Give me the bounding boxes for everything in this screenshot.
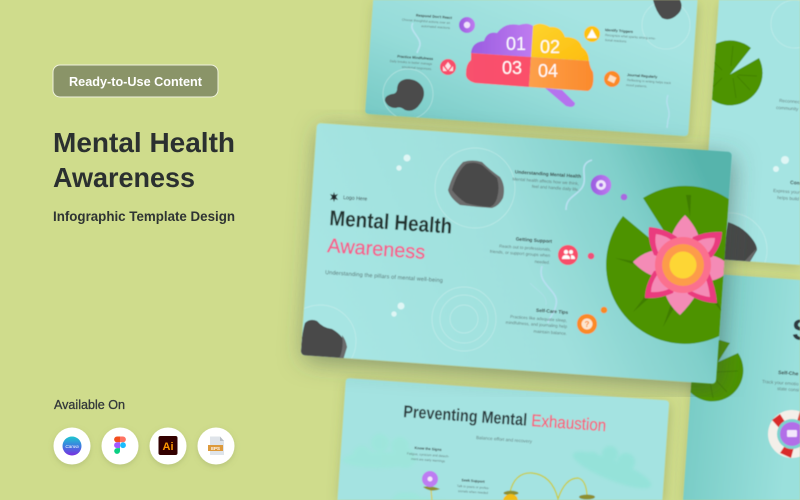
- squiggle: [412, 23, 420, 53]
- dot pink: [588, 253, 594, 259]
- icon: Canva: Canva: [65, 444, 79, 449]
- dots: [773, 156, 789, 172]
- squiggle: [541, 266, 556, 323]
- squiggle faint: [530, 283, 546, 305]
- icon: rock right: [642, 0, 690, 49]
- text: Connect: [773, 180, 800, 202]
- icon: cloud small: [392, 492, 445, 500]
- item: Know the Signs: Fatigue, cynicism and detach-: [407, 452, 449, 458]
- item: Practice Mindfulness: [390, 54, 456, 75]
- item: Getting Support: friends, or support groups when: [490, 249, 551, 258]
- icon: lily pad: [606, 185, 730, 344]
- item: Self-Care Tips: [505, 308, 569, 336]
- dots: [391, 154, 410, 317]
- icon: cloud right: [573, 446, 651, 488]
- item: Practice Mindfulness: Daily breaks to better manage: [390, 59, 432, 66]
- icon: question: [577, 314, 597, 334]
- item: Getting Support: needed.: [534, 259, 550, 265]
- subtitle: Understanding the pillars of mental well-being: [325, 270, 443, 284]
- icon: olive cap: [579, 495, 595, 499]
- icon: rock left: [383, 69, 433, 119]
- icon: Canva: [54, 428, 90, 464]
- text: Connect: Express your: [773, 188, 800, 195]
- item: Identify Triggers: Recognize what sparks strong emo-: [605, 33, 656, 41]
- item: Getting Support: Getting Support: [515, 236, 553, 245]
- rings: [432, 287, 496, 351]
- badge: Ready-to-Use Content: [69, 74, 203, 89]
- subheading: Infographic Template Design: [53, 208, 235, 224]
- item: Understanding Mental Health: Understanding Mental Health: [515, 169, 581, 180]
- icon: Figma: [102, 428, 138, 464]
- heading: Awareness: [53, 162, 195, 193]
- item: Know the Signs: [407, 446, 449, 463]
- text: Connect: Con: [790, 180, 800, 187]
- title: Mental Health: [329, 206, 453, 239]
- heading: Mental Health: [53, 127, 235, 158]
- logo: Logo Here: [343, 195, 368, 203]
- subtitle: Balance effort and recovery: [476, 435, 533, 444]
- icon: purple flower: [422, 471, 440, 500]
- item: Respond Don't React: [402, 13, 475, 33]
- text: Reconnect: [776, 98, 800, 112]
- item: Self-Care Tips: maintain balance.: [533, 329, 567, 336]
- rock: [724, 212, 768, 262]
- dot orange: [601, 307, 607, 313]
- item: Respond Don't React: Choose thoughtful actions over an: [402, 18, 450, 25]
- yellow stems: [510, 473, 587, 499]
- brain: section 02: 02: [540, 37, 560, 57]
- item: Seek Support: sionals when needed: [458, 489, 488, 495]
- icon: question: ?: [585, 320, 590, 329]
- title: [404, 404, 606, 432]
- squiggle: [566, 160, 592, 210]
- title: Exhaustion: [531, 411, 607, 435]
- item: Identify Triggers: [584, 26, 656, 44]
- brain: section 02: [531, 24, 589, 61]
- text: Self-Check: [762, 370, 799, 393]
- brain: section 03: 03: [502, 58, 522, 78]
- panel: right upper slide: [706, 0, 800, 271]
- item: Understanding Mental Health: Mental health affects how we think,: [512, 176, 579, 186]
- brain: section 01: 01: [506, 34, 526, 54]
- item: Getting Support: [490, 236, 553, 265]
- icon: lily pad small: [711, 40, 764, 106]
- item: Identify Triggers: tional reactions: [605, 38, 627, 44]
- item: Know the Signs: Know the Signs: [414, 446, 442, 452]
- item: Self-Care Tips: mindfulness, and journaling help: [505, 320, 568, 329]
- icon: EPS file: EPS: [211, 446, 220, 451]
- panel: right lower slide: [681, 273, 800, 500]
- text: Self-Check: state consi: [777, 386, 799, 393]
- item: Getting Support: Reach out to professionals,: [499, 243, 551, 252]
- title: [327, 206, 453, 264]
- item: Self-Care Tips: Self-Care Tips: [536, 308, 569, 316]
- title: Awareness: [327, 235, 426, 264]
- item: Identify Triggers: Identify Triggers: [605, 28, 633, 34]
- item: Self-Care Tips: Practices like adequate sleep,: [510, 314, 567, 323]
- item: Understanding Mental Health: feel and handle daily life.: [532, 184, 579, 192]
- item: Seek Support: [457, 478, 489, 495]
- item: Practice Mindfulness: Practice Mindfulness: [397, 54, 433, 61]
- icon: EPS file: [198, 428, 234, 464]
- brain: section 01: [471, 24, 533, 57]
- item: Respond Don't React: Respond Don't React: [416, 13, 453, 20]
- item: Understanding Mental Health: [512, 169, 581, 192]
- squiggle right: [667, 95, 669, 128]
- icon: lily pad lower: [690, 340, 744, 402]
- title: Preventing Mental: [403, 402, 528, 430]
- item: Practice Mindfulness: emotional responses.: [402, 65, 432, 71]
- dot purple: [621, 194, 627, 200]
- text: Self-Check: Track your emotio: [762, 379, 799, 387]
- text: Connect: helps build: [777, 195, 800, 202]
- icon: yellow flower: [503, 491, 518, 500]
- badge: [53, 65, 218, 97]
- item: Respond Don't React: automated reactions: [421, 24, 451, 30]
- icon: Illustrator: Ai: [162, 441, 174, 453]
- icon: purple head: [591, 175, 611, 195]
- brain: section 03: [466, 53, 531, 87]
- item: Journal Regularly: [604, 71, 671, 88]
- icon: cloud left: [343, 434, 417, 468]
- logo: [330, 192, 368, 203]
- text: Reconnect: community: [776, 105, 799, 112]
- icon: people: [558, 245, 578, 265]
- brain stem: [545, 88, 575, 107]
- icon: rock large: [435, 148, 515, 228]
- icon: rock corner: [300, 304, 356, 359]
- brain: section 04: [529, 57, 593, 91]
- item: Know the Signs: ment are early warnings: [411, 457, 446, 463]
- item: Seek Support: Talk to peers or profes-: [457, 484, 489, 490]
- icon: lotus flower: [633, 215, 732, 315]
- panel: main title slide: [284, 123, 764, 384]
- panel: top brain slide: [365, 0, 698, 136]
- brain: section 04: 04: [538, 61, 558, 81]
- text: Self-Check: Self-Che: [778, 370, 799, 377]
- icon: lifebuoy: [768, 410, 800, 458]
- item: Seek Support: Seek Support: [461, 478, 486, 484]
- panel: bottom exhaustion slide: [338, 378, 669, 500]
- label: Available On: Available On: [54, 397, 125, 412]
- item: Journal Regularly: mood patterns.: [626, 83, 648, 88]
- icon: Illustrator: [150, 428, 186, 464]
- heading: [53, 127, 235, 193]
- item: Journal Regularly: Reflecting in writing helps track: [627, 78, 671, 85]
- rings: [771, 0, 800, 48]
- item: Journal Regularly: Journal Regularly: [627, 73, 657, 79]
